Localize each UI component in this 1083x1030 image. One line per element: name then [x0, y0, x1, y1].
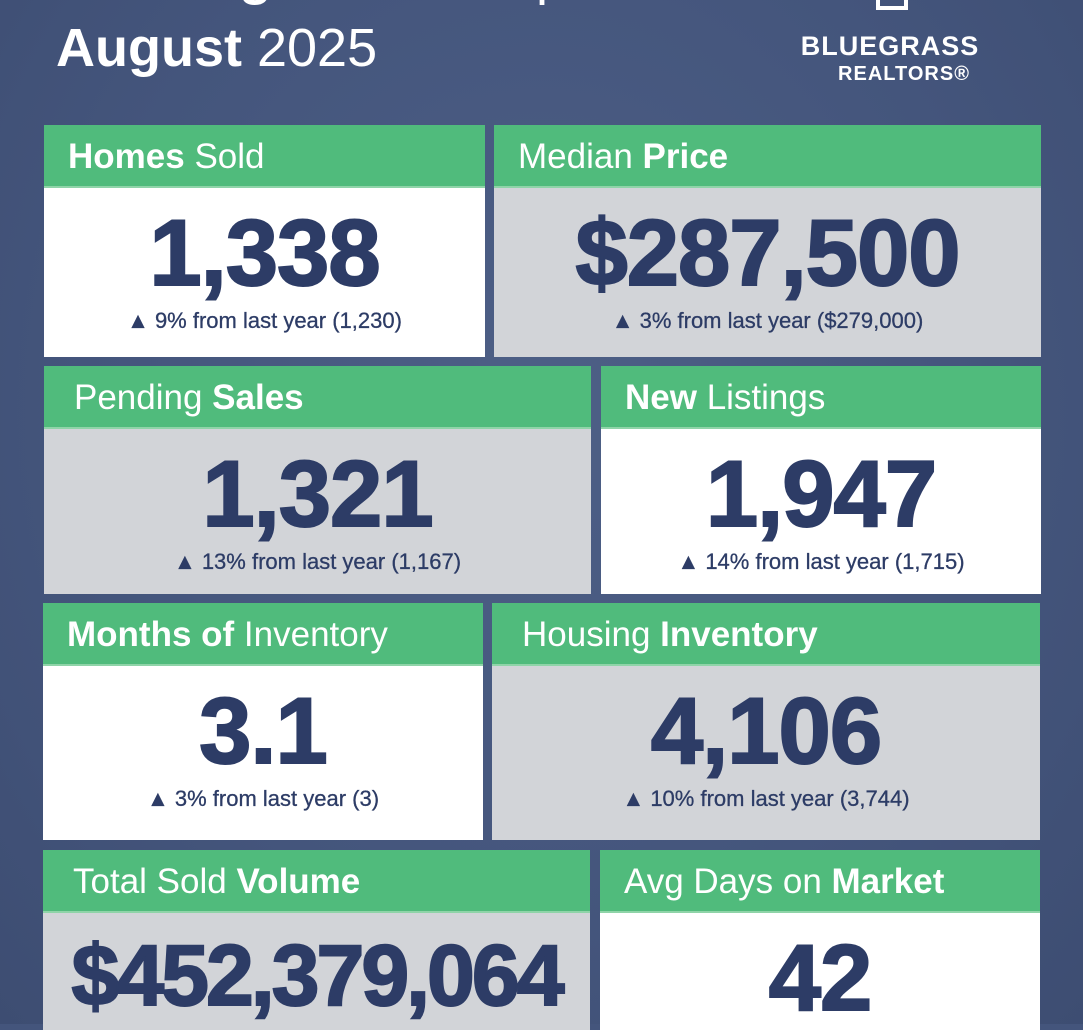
- panel: new listings: 1,947: [706, 441, 936, 546]
- logo: [801, 0, 979, 85]
- logo: REALTORS®: [838, 63, 970, 85]
- panel: median price: [494, 125, 1041, 357]
- panel: homes sold: [44, 125, 485, 357]
- title: August 2025: [56, 18, 377, 78]
- title: [56, 0, 629, 78]
- panel: pending sales: 1,321: [202, 441, 433, 546]
- panel: months of inventory: [43, 603, 483, 840]
- panel: housing inventory: ▲ 10% from last year (3,744): [622, 786, 910, 811]
- panel: median price: ▲ 3% from last year ($279,000): [612, 308, 923, 333]
- panel: months of inventory: Months of Inventory: [67, 615, 388, 654]
- panel: housing inventory: Housing Inventory: [522, 615, 818, 654]
- panel: months of inventory: ▲ 3% from last year (3): [147, 786, 379, 811]
- panel: pending sales: Pending Sales: [74, 378, 304, 417]
- panel: median price: $287,500: [575, 200, 960, 305]
- panel: total sold volume: $452,379,064: [71, 928, 562, 1024]
- panel: median price: Median Price: [518, 137, 728, 176]
- panel: pending sales: [44, 366, 591, 594]
- panel: housing inventory: [492, 603, 1040, 840]
- panel: avg days on market: 42: [769, 925, 871, 1030]
- panel: pending sales: ▲ 13% from last year (1,167): [174, 549, 461, 574]
- panel: housing inventory: 4,106: [651, 678, 881, 783]
- panel: new listings: New Listings: [625, 378, 825, 417]
- panel: homes sold: Homes Sold: [68, 137, 264, 176]
- panel: total sold volume: Total Sold Volume: [73, 862, 360, 901]
- panel: months of inventory: 3.1: [199, 678, 327, 783]
- logo: BLUEGRASS: [801, 31, 979, 61]
- panel: avg days on market: [600, 850, 1040, 1030]
- panel: new listings: ▲ 14% from last year (1,715): [677, 549, 965, 574]
- panel: homes sold: 1,338: [149, 200, 380, 305]
- panel: new listings: [601, 366, 1041, 594]
- panel: avg days on market: Avg Days on Market: [624, 862, 944, 901]
- panel: total sold volume: [43, 850, 590, 1030]
- panel: homes sold: ▲ 9% from last year (1,230): [127, 308, 402, 333]
